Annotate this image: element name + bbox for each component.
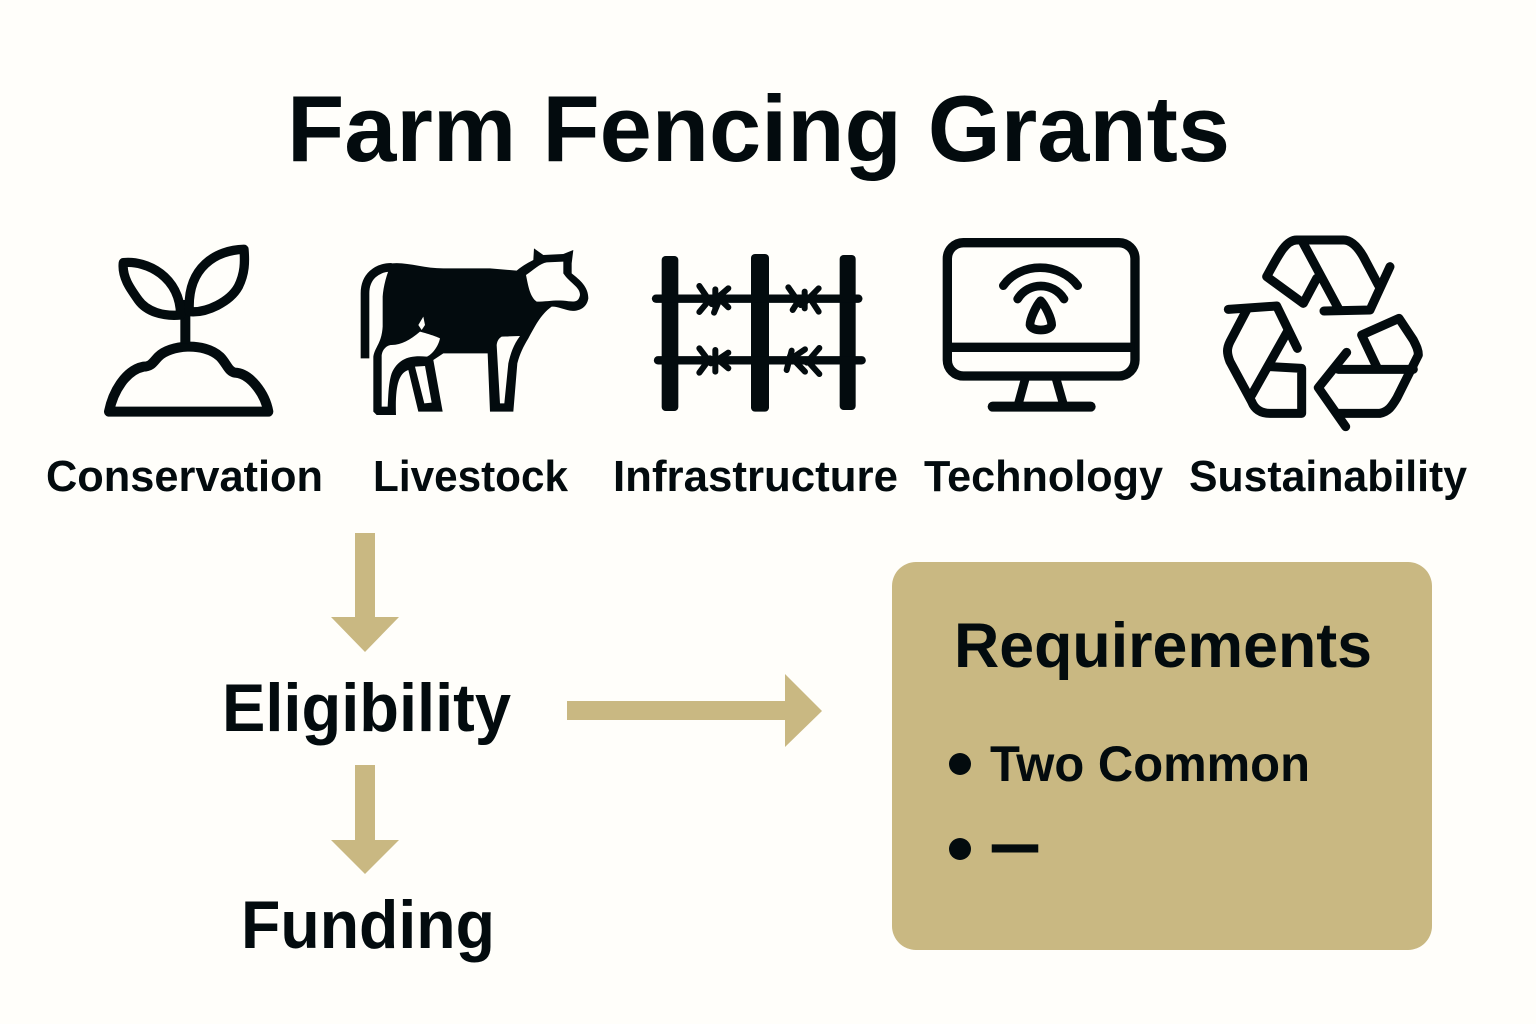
- label: Infrastructure: Infrastructure: [613, 452, 898, 501]
- text: dash: —: [993, 816, 1037, 874]
- bullet two: [949, 838, 971, 860]
- icon: barbed wire fence (infrastructure): [656, 254, 862, 412]
- arrow: down to Funding: [331, 765, 399, 874]
- arrow: down to Eligibility: [331, 533, 399, 652]
- icon: recycling symbol (sustainability): [1227, 240, 1418, 427]
- arrow: right to Requirements: [567, 674, 822, 747]
- title: Farm Fencing Grants: [287, 76, 1230, 181]
- heading: Requirements: Requirements: [954, 611, 1372, 681]
- heading: Funding: Funding: [241, 887, 495, 963]
- icon: computer monitor with signal (technology): [947, 243, 1135, 407]
- heading: Eligibility: Eligibility: [222, 670, 511, 746]
- panel: requirements: [892, 562, 1432, 950]
- label: Sustainability: Sustainability: [1189, 452, 1468, 501]
- text: Two Common: Two Common: [990, 736, 1310, 792]
- icon: sprout in soil (conservation): [109, 249, 268, 412]
- label: Technology: Technology: [924, 452, 1164, 501]
- label: Conservation: Conservation: [46, 452, 323, 501]
- label: Livestock: Livestock: [373, 452, 569, 501]
- icon: cow (livestock): [365, 248, 588, 415]
- bullet one: [949, 753, 971, 775]
